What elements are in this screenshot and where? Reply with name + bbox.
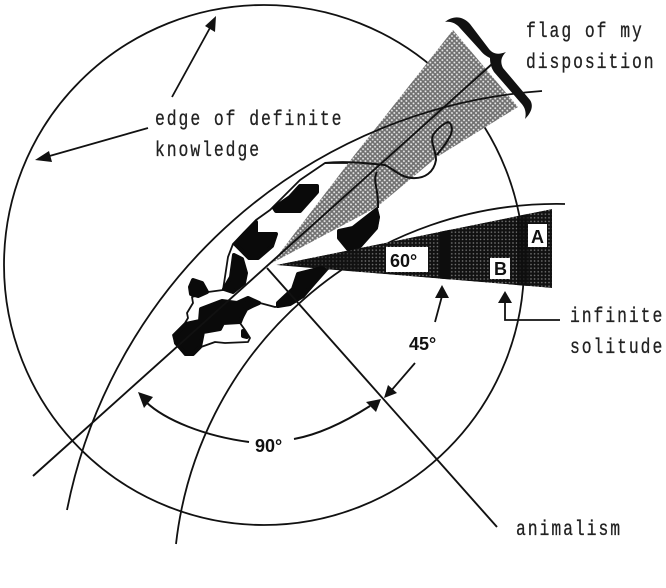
label: edge of definite knowledge: knowledge — [155, 138, 261, 163]
arrow: to left of circle — [35, 128, 148, 162]
cow black patches — [175, 186, 378, 354]
arc: lower curve — [176, 204, 565, 544]
label: flag of my disposition: flag of my — [526, 19, 644, 44]
axis line — [33, 64, 492, 476]
box: 60 degrees — [386, 247, 428, 272]
curly brace — [445, 17, 532, 119]
cow tail — [325, 122, 452, 208]
flag of disposition: grey wedge — [272, 30, 518, 263]
angle: 90 degrees with arrows — [138, 392, 381, 456]
angle: 90 degrees with arrows: 90° — [255, 436, 282, 456]
label: infinite solitude: infinite — [570, 304, 664, 329]
box: 60 degrees: 60° — [390, 251, 417, 271]
box: A: A — [531, 227, 544, 247]
dark wedge: infinite solitude — [276, 209, 552, 288]
label: animalism: animalism — [516, 517, 622, 542]
label: infinite solitude: solitude — [570, 335, 664, 360]
arrow: to top of circle — [172, 16, 216, 97]
angle: 45 degrees with arrows: 45° — [409, 334, 436, 354]
arc: upper curve — [67, 91, 542, 510]
box: A — [528, 224, 547, 247]
cow body — [173, 163, 379, 355]
line to animalism — [267, 268, 497, 527]
angle: 45 degrees with arrows — [384, 285, 449, 398]
arrow: infinite solitude pointer — [498, 291, 560, 320]
label: flag of my disposition: disposition — [526, 50, 656, 75]
label: edge of definite knowledge: edge of definite — [155, 107, 343, 132]
box: B: B — [494, 259, 507, 279]
box: B — [490, 258, 510, 279]
circle: outer boundary — [4, 5, 524, 525]
